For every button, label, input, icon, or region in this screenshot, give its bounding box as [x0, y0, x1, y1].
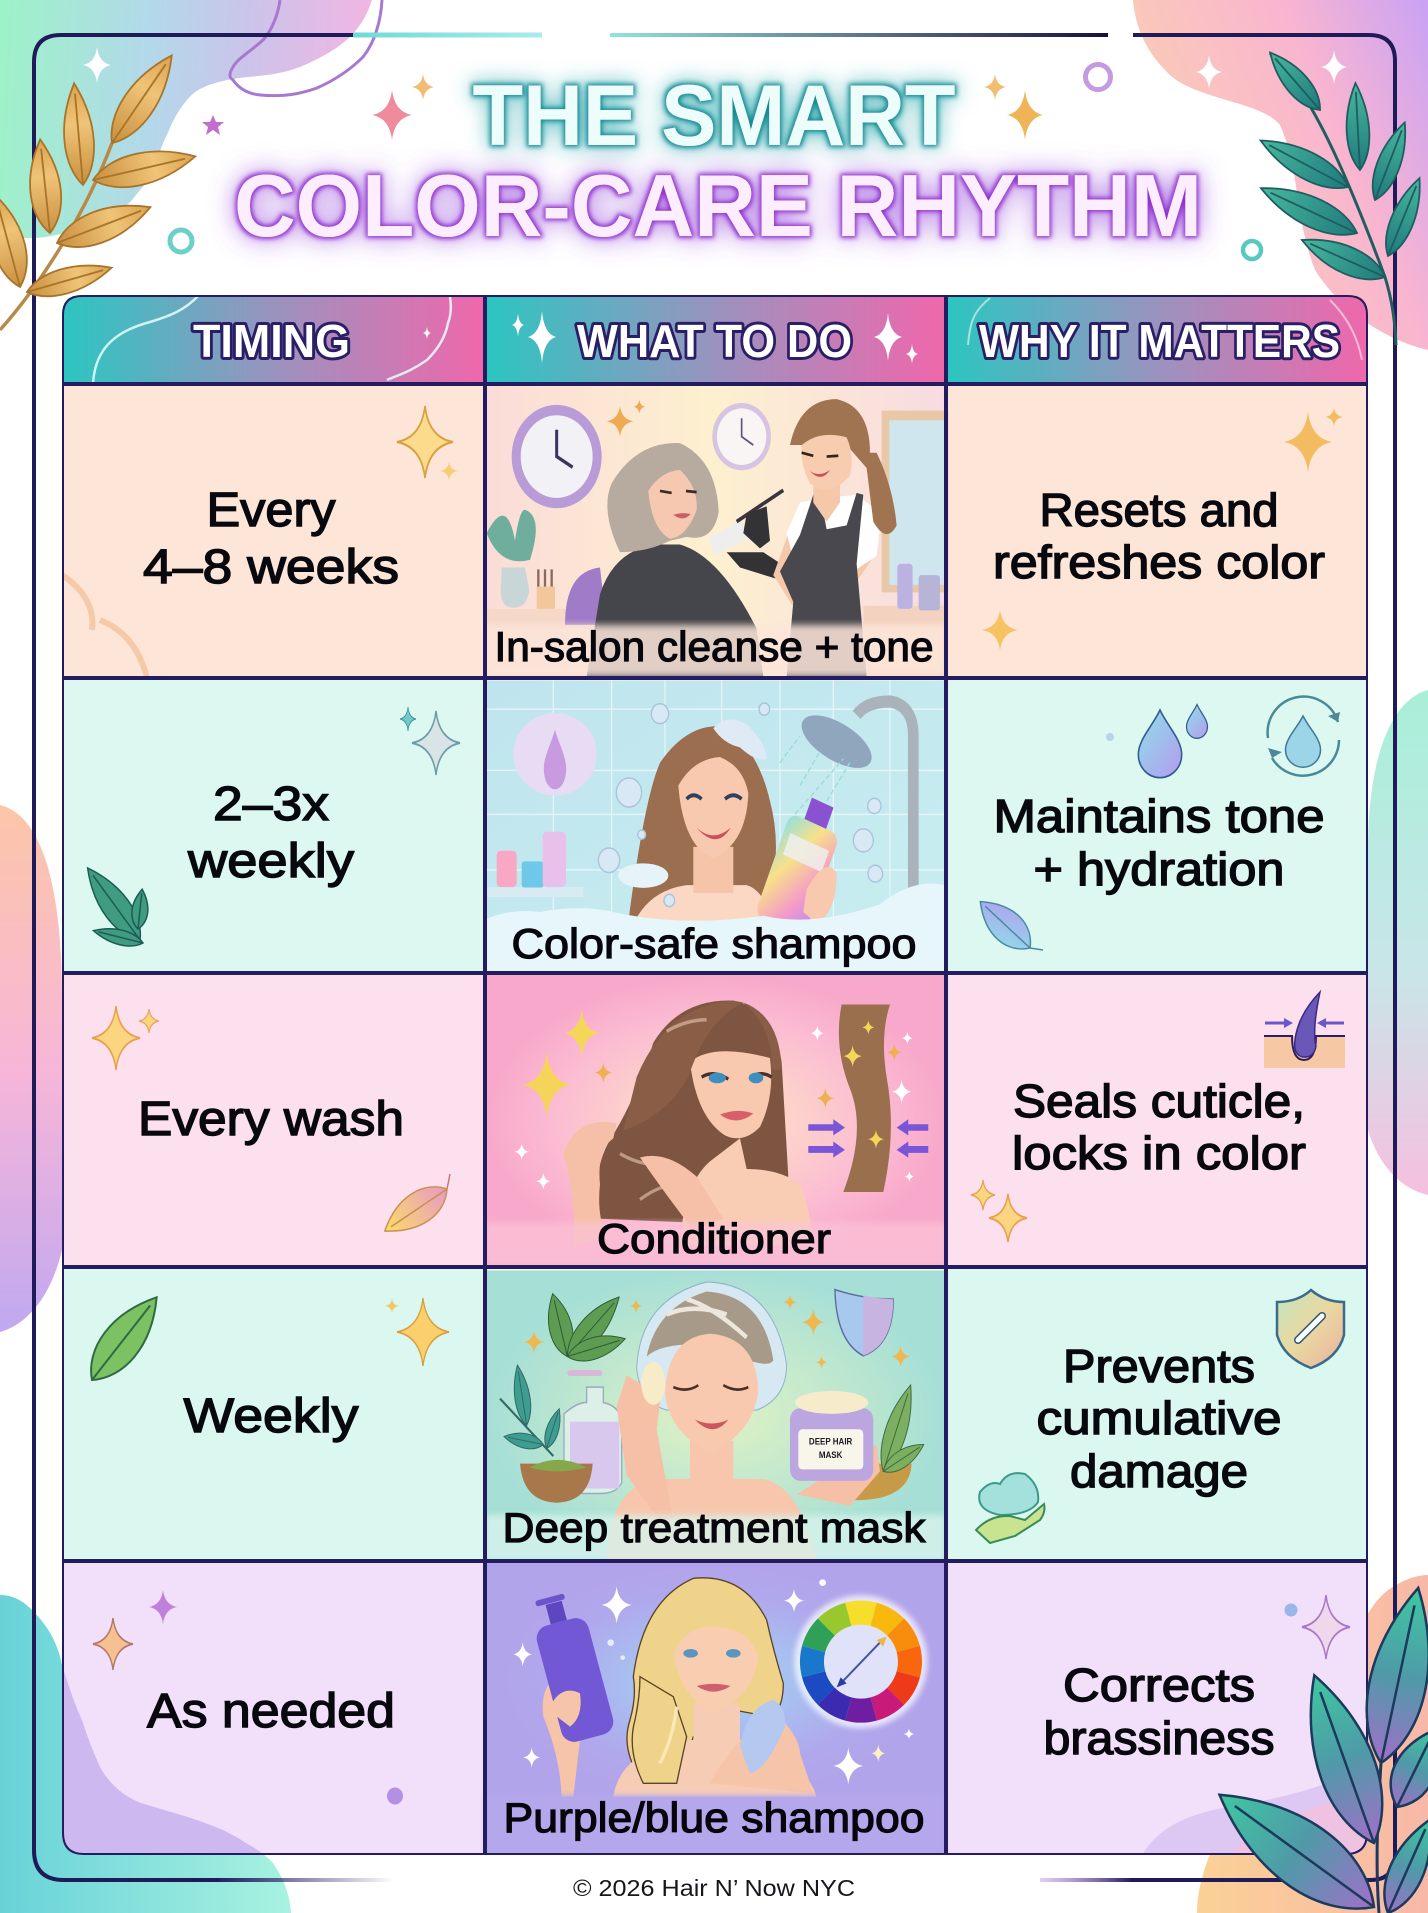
- illustration: color-safe shampoo: [485, 680, 945, 973]
- why-it-matters column text: Corrects: [1063, 1659, 1255, 1711]
- timing column text: 2–3x: [213, 778, 329, 831]
- title decorations: [83, 47, 1347, 259]
- why-it-matters column text: damage: [1070, 1445, 1248, 1497]
- timing column text: 4–8 weeks: [143, 541, 399, 594]
- illustration: deep treatment mask: MASK: [819, 1449, 843, 1460]
- illustration: conditioner: [485, 975, 945, 1267]
- illustration: purple/blue shampoo: [485, 1562, 945, 1855]
- why-it-matters column text: locks in color: [1012, 1127, 1306, 1179]
- what-to-do column labels: In-salon cleanse + tone: [494, 623, 934, 670]
- why-it-matters column text: Prevents: [1063, 1340, 1255, 1392]
- why-it-matters column text: brassiness: [1044, 1712, 1274, 1764]
- gold leaf branch: [0, 47, 199, 330]
- why-it-matters column text: Resets and: [1040, 484, 1278, 536]
- what-to-do column labels: Deep treatment mask: [502, 1504, 927, 1551]
- why-it-matters column text: Maintains tone: [994, 790, 1324, 842]
- illustration: deep treatment mask: DEEP HAIR: [809, 1436, 853, 1447]
- why-it-matters column text: + hydration: [1034, 843, 1284, 895]
- title: THE SMART: [472, 68, 956, 164]
- icon group: row 4 leaf, star, shield and soap: [77, 1285, 1344, 1543]
- icon group: row 2 leaf, drops and refresh: [77, 697, 1340, 960]
- icon group: row 3 stars, leaf and cuticle: [92, 992, 1345, 1244]
- why-it-matters column text: Seals cuticle,: [1013, 1075, 1305, 1127]
- why-it-matters column text: refreshes color: [993, 536, 1325, 588]
- header row: WHY IT MATTERS: [979, 315, 1340, 367]
- footer copyright: © 2026 Hair N’ Now NYC: [573, 1875, 855, 1901]
- title: COLOR-CARE RHYTHM: [234, 156, 1202, 255]
- what-to-do column labels: [494, 623, 934, 1841]
- header row: [62, 293, 1368, 384]
- icon group: row 5 stars and dots: [93, 1590, 1350, 1804]
- why-it-matters column text: cumulative: [1036, 1392, 1282, 1444]
- table: [62, 293, 1369, 1855]
- header row: WHAT TO DO: [577, 315, 852, 367]
- bottom-right leaf cluster: [1200, 1582, 1428, 1913]
- icon group: row 1 stars: [397, 406, 1343, 650]
- timing column text: Weekly: [184, 1390, 358, 1443]
- title: [234, 68, 1202, 255]
- what-to-do column labels: Conditioner: [597, 1215, 831, 1262]
- header row: TIMING: [193, 315, 350, 367]
- timing column text: Every: [206, 484, 336, 537]
- timing column text: As needed: [147, 1685, 395, 1738]
- what-to-do column labels: Color-safe shampoo: [512, 920, 916, 967]
- table grid lines: [62, 295, 1368, 1855]
- timing column text: Every wash: [138, 1093, 404, 1146]
- why-it-matters column text: [993, 484, 1325, 1764]
- illustration: deep treatment mask: [485, 1270, 945, 1561]
- timing column text: [138, 484, 404, 1738]
- row backgrounds: [62, 384, 1369, 1855]
- illustration: in-salon cleanse and tone: [485, 385, 948, 677]
- teal leaf branch: [1254, 45, 1428, 345]
- what-to-do column labels: Purple/blue shampoo: [504, 1794, 924, 1841]
- timing column text: weekly: [187, 835, 354, 888]
